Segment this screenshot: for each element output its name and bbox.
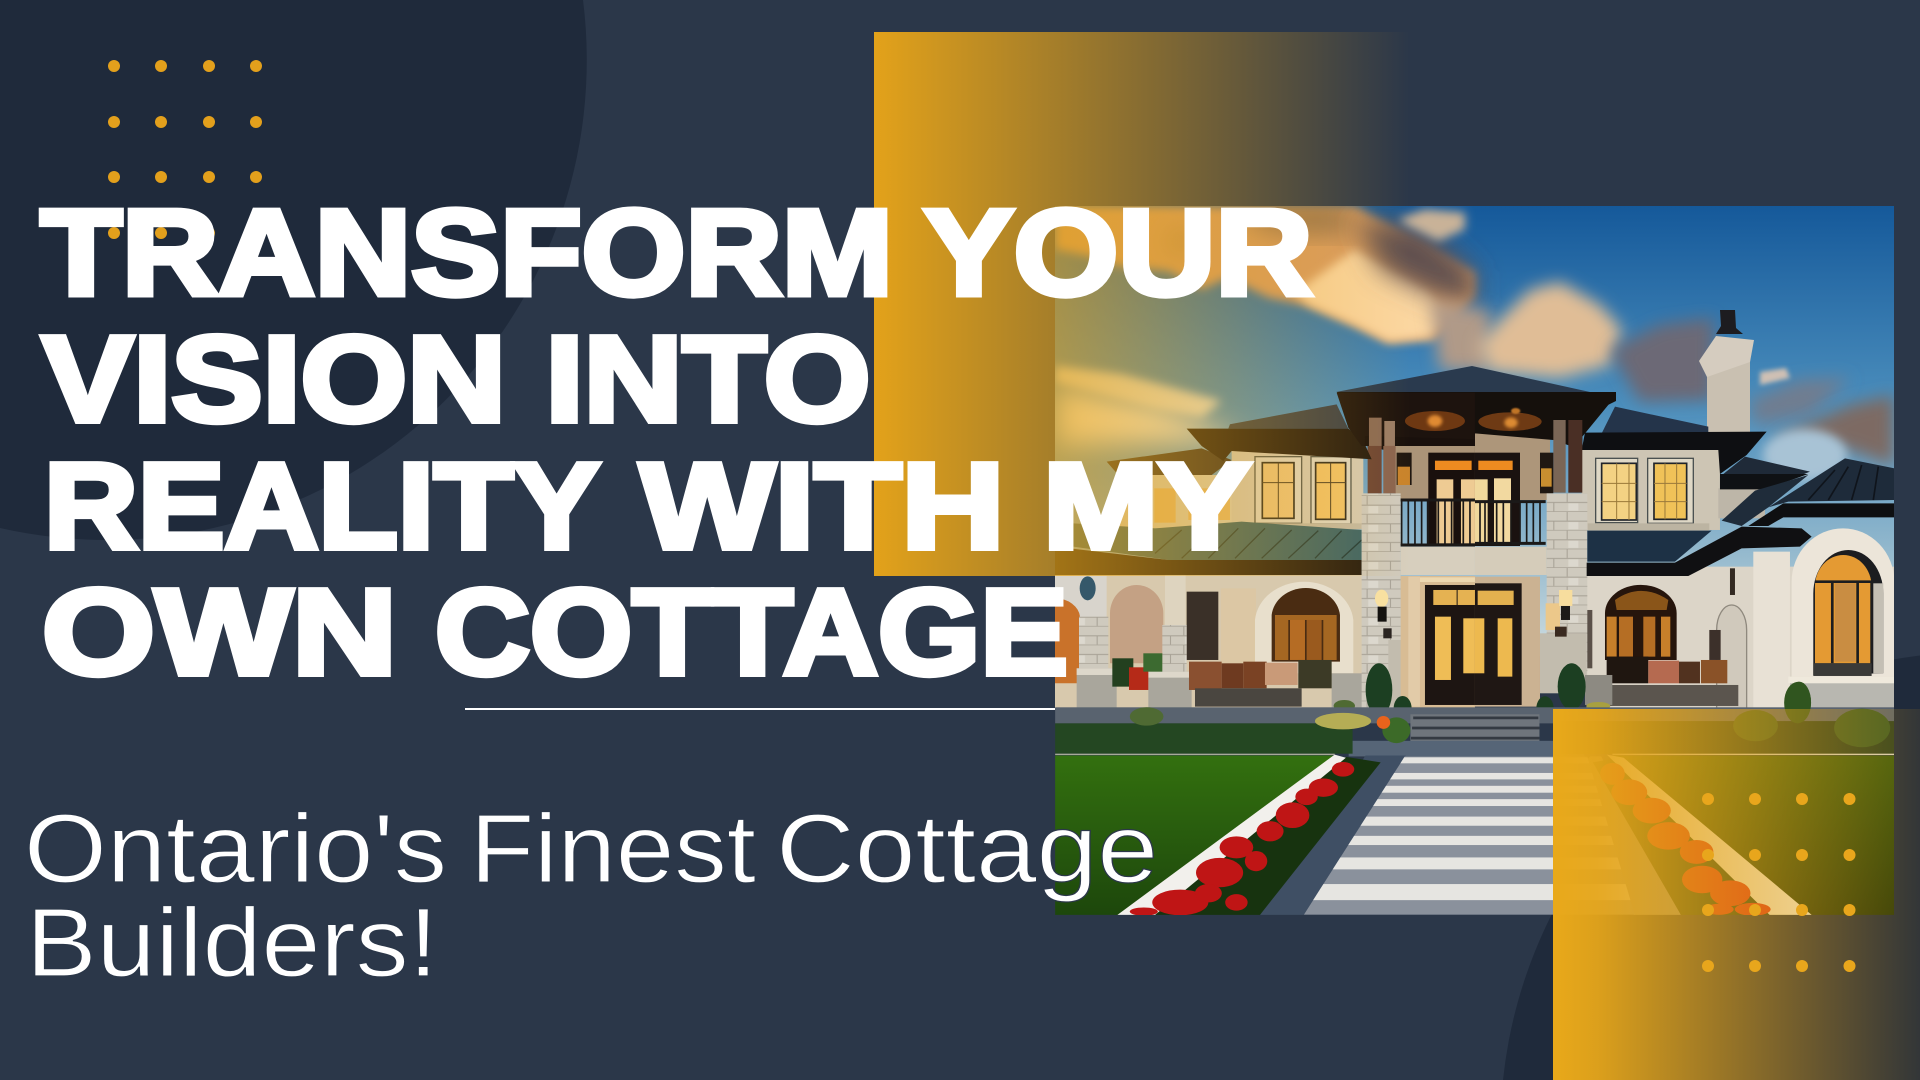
lower right roof [1587, 527, 1812, 576]
flower beds [1117, 755, 1812, 916]
lower wall [1587, 552, 1894, 710]
title: VISION [42, 311, 506, 447]
front garden [1055, 682, 1894, 916]
title: WITH [640, 438, 1004, 574]
dot grid bottom right [1702, 793, 1856, 972]
green metal roof [1055, 522, 1362, 576]
arched window centre right [1605, 585, 1677, 660]
right roofs upper [1475, 400, 1767, 474]
title: MY [1043, 438, 1251, 574]
title: INTO [546, 311, 870, 447]
sky and clouds [1055, 206, 1894, 656]
house right half [1475, 400, 1894, 722]
decorative dark circle bottom right [1503, 656, 1920, 1080]
title: OWN [42, 564, 397, 700]
central roof [1336, 366, 1616, 452]
title: TRANSFORM [40, 184, 893, 320]
left pillars [1077, 575, 1363, 713]
stone pillar left [1362, 493, 1401, 708]
balcony door and railing [1401, 453, 1475, 575]
lawns [1055, 754, 1894, 915]
title: COTTAGE [435, 564, 1068, 700]
far left wing [1107, 448, 1233, 528]
subtitle: Finest [470, 794, 756, 903]
roof left wing eave [1187, 393, 1475, 461]
walkway ground [1055, 707, 1894, 756]
subtitle [24, 794, 1158, 997]
subtitle: Builders! [26, 888, 438, 997]
decorative dark circle top left [0, 0, 587, 540]
roof back wing [1720, 457, 1810, 489]
front door left part [1401, 576, 1475, 708]
hedges [1055, 682, 1894, 754]
title: YOUR [924, 184, 1312, 320]
porch furniture [1112, 653, 1332, 707]
subtitle: Cottage [776, 794, 1158, 903]
dot grid top left [108, 60, 262, 239]
stone pillar right [1540, 493, 1587, 693]
house left half [1055, 440, 1475, 721]
gold gradient panel bottom right [1553, 709, 1920, 1080]
subtitle: Ontario's [24, 794, 447, 903]
photo: luxury cottage at sunset [1055, 206, 1894, 916]
front door right part [1475, 577, 1540, 707]
title: REALITY [44, 438, 600, 574]
arched window far right [1788, 528, 1894, 683]
shrubs right [1536, 663, 1811, 708]
garden paving path [1260, 756, 1713, 915]
title [40, 184, 1312, 700]
big right roof [1722, 458, 1894, 526]
upper wall and back wing [1475, 433, 1765, 530]
brown columns [1368, 440, 1412, 493]
shrubs left [1334, 663, 1412, 708]
underline rule [465, 708, 1055, 710]
chimney [1699, 310, 1754, 435]
columns and balcony [1475, 420, 1582, 575]
porch walls [1055, 575, 1363, 708]
furniture right [1585, 657, 1738, 706]
upper wall and windows [1232, 440, 1475, 529]
gold gradient panel top [874, 32, 1410, 576]
window upper right [1588, 458, 1709, 531]
